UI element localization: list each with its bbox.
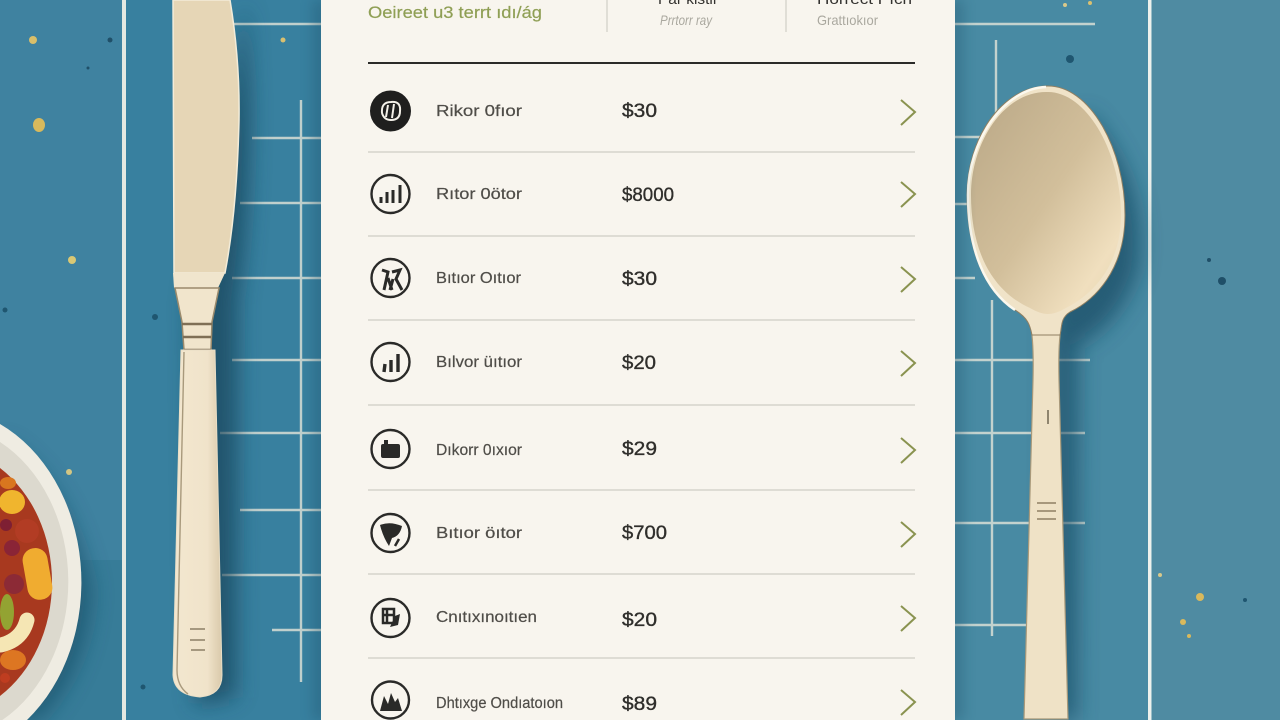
- header: column one: Prrtorr ray: [660, 12, 713, 28]
- row 5: Dıkorr 0ıxıor: [436, 442, 522, 459]
- row 8: $89: [622, 694, 657, 715]
- icon: bars small: [372, 343, 410, 381]
- row 6: [372, 514, 915, 552]
- row 7: [372, 599, 915, 637]
- knife blade: [173, 0, 239, 273]
- header rule: [368, 62, 915, 64]
- icon: figures: [372, 259, 410, 297]
- row 8: Dhtıxge Ondıatoıon: [436, 695, 563, 712]
- row 2: [372, 175, 915, 213]
- row 6: $700: [622, 523, 667, 544]
- icon: box: [372, 430, 410, 468]
- row 4: [372, 343, 915, 381]
- bowl contents: [0, 477, 54, 683]
- icon: leaf shield: [372, 514, 410, 552]
- row 4: Bılvor üıtıor: [436, 354, 522, 371]
- row 1: [370, 90, 915, 132]
- row 5: [372, 430, 915, 468]
- row 3: [372, 259, 915, 297]
- knife: [173, 0, 250, 705]
- row 7: Cnıtıxınoıtıen: [436, 609, 537, 626]
- row 1: Rikor 0fıor: [436, 103, 522, 120]
- knife bolster: [175, 288, 219, 350]
- row 6: Bıtıor öıtor: [436, 525, 522, 542]
- header: title: Oeireet u3 terrt ıdı/ág: [368, 3, 542, 22]
- knife handle: [173, 350, 222, 697]
- spoon bowl: [967, 86, 1125, 335]
- row 2: Rıtor 0ötor: [436, 186, 522, 203]
- row 8: [372, 682, 915, 718]
- soup bowl: [0, 424, 92, 720]
- header: column two: Grattıokıor: [817, 12, 878, 28]
- row 4: $20: [622, 353, 656, 374]
- header: column two: [786, 0, 912, 32]
- icon: group: [372, 682, 409, 718]
- panel shadow: [312, 0, 964, 720]
- row 2: $8000: [622, 185, 674, 206]
- spoon handle: [1024, 322, 1068, 719]
- spoon: [967, 86, 1140, 720]
- row 7: $20: [622, 610, 657, 631]
- header: column one: [607, 0, 718, 32]
- menu panel: [321, 0, 955, 720]
- row 3: $30: [622, 269, 657, 290]
- right grid lines: [955, 24, 1095, 636]
- icon: filled badge: [370, 90, 411, 132]
- row 1: $30: [622, 101, 657, 122]
- icon: boxes: [372, 599, 410, 637]
- left grid lines: [220, 24, 321, 682]
- row 5: $29: [622, 439, 657, 460]
- icon: bars: [372, 175, 410, 213]
- row 3: Bıtıor Oıtıor: [436, 270, 521, 287]
